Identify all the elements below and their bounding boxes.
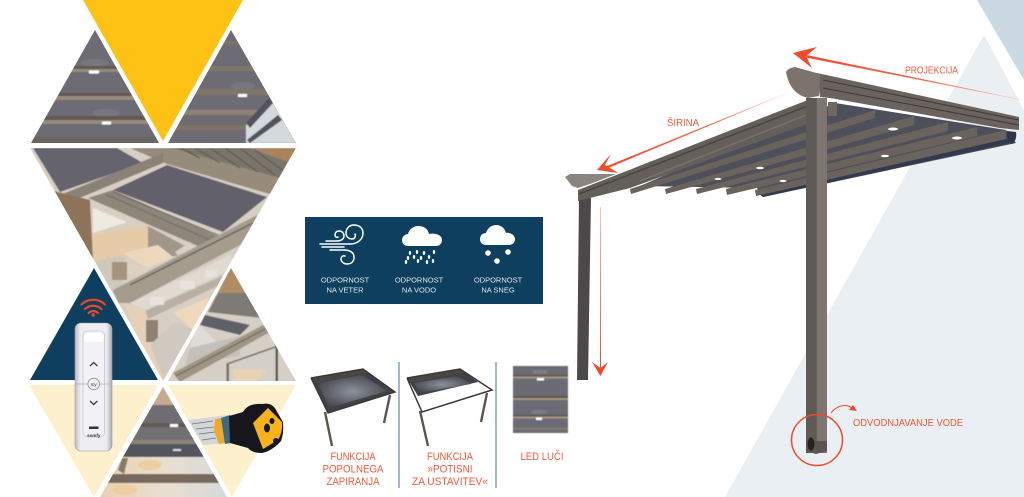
arrow: drain pointer xyxy=(831,405,857,413)
panel: resistance icons xyxy=(305,217,543,304)
projection beam xyxy=(817,73,1019,130)
right end gutter xyxy=(786,67,820,98)
label: push to stop function: ZA USTAVITEV« xyxy=(412,476,488,488)
divider right xyxy=(495,362,497,488)
left post xyxy=(577,198,591,380)
icon: closed pergola function xyxy=(311,369,395,446)
label: wind resistance: NA VETER xyxy=(326,286,364,294)
label: closed pergola function: ZAPIRANJA xyxy=(326,476,380,488)
arrow: width xyxy=(597,92,790,173)
photo: pergola corner xyxy=(165,265,300,383)
label: closed pergola function xyxy=(322,451,384,488)
panel: hexagon photo mosaic xyxy=(25,0,300,497)
icon: remote control: somfy xyxy=(87,433,101,438)
arrow: height xyxy=(592,207,608,376)
photo: pergola interior xyxy=(30,148,296,381)
label: snow resistance: NA SNEG xyxy=(481,286,515,294)
navy triangle xyxy=(30,268,158,380)
left end gutter xyxy=(565,174,616,188)
photo: LED roof left xyxy=(31,30,159,143)
pergola illustration xyxy=(565,67,1019,454)
right post xyxy=(806,98,827,453)
label: width: ŠIRINA xyxy=(667,116,699,129)
label: drainage: ODVODNJAVANJE VODE xyxy=(853,417,963,429)
divider left xyxy=(398,362,400,488)
LED spots xyxy=(714,128,962,182)
icon: rain cloud xyxy=(402,226,442,264)
callout: drain circle xyxy=(792,414,842,466)
icon: remote control xyxy=(75,323,112,451)
label: snow resistance: ODPORNOST xyxy=(474,276,523,284)
photo: LED roof right xyxy=(165,28,300,146)
width beam xyxy=(578,98,813,201)
label: closed pergola function: POPOLNEGA xyxy=(322,464,384,476)
icon: remote control: my xyxy=(91,382,97,387)
icon: snow cloud xyxy=(480,225,515,264)
icon: wind xyxy=(320,225,363,264)
background triangle: light blue xyxy=(725,35,1024,497)
bracket xyxy=(828,102,837,116)
drain hole xyxy=(808,438,814,450)
icon: wifi signal xyxy=(82,300,105,316)
icon: tubular motor xyxy=(188,404,283,453)
label: LED lights: LED LUČI xyxy=(520,450,564,463)
arrow: projection xyxy=(793,47,1023,100)
label: wind resistance: ODPORNOST xyxy=(321,276,370,284)
louvers xyxy=(630,110,1006,196)
label: water resistance: ODPORNOST xyxy=(395,276,444,284)
icon: push to stop pergola xyxy=(407,369,492,446)
background corner: blue grey xyxy=(977,0,1024,80)
yellow triangle xyxy=(83,0,243,141)
label: push to stop function: »POTISNI xyxy=(428,464,472,476)
photo: LED lights xyxy=(513,366,568,433)
label: water resistance: NA VODO xyxy=(402,286,436,294)
label: push to stop function xyxy=(412,451,488,488)
cream triangle left xyxy=(29,385,158,497)
label: push to stop function: FUNKCIJA xyxy=(427,451,474,463)
label: projection: PROJEKCIJA xyxy=(905,64,958,76)
roller end xyxy=(1007,131,1016,144)
roof underside xyxy=(640,103,1016,197)
label: closed pergola function: FUNKCIJA xyxy=(330,451,376,463)
cream triangle right xyxy=(168,385,296,497)
photo: roof with sky xyxy=(100,385,230,497)
